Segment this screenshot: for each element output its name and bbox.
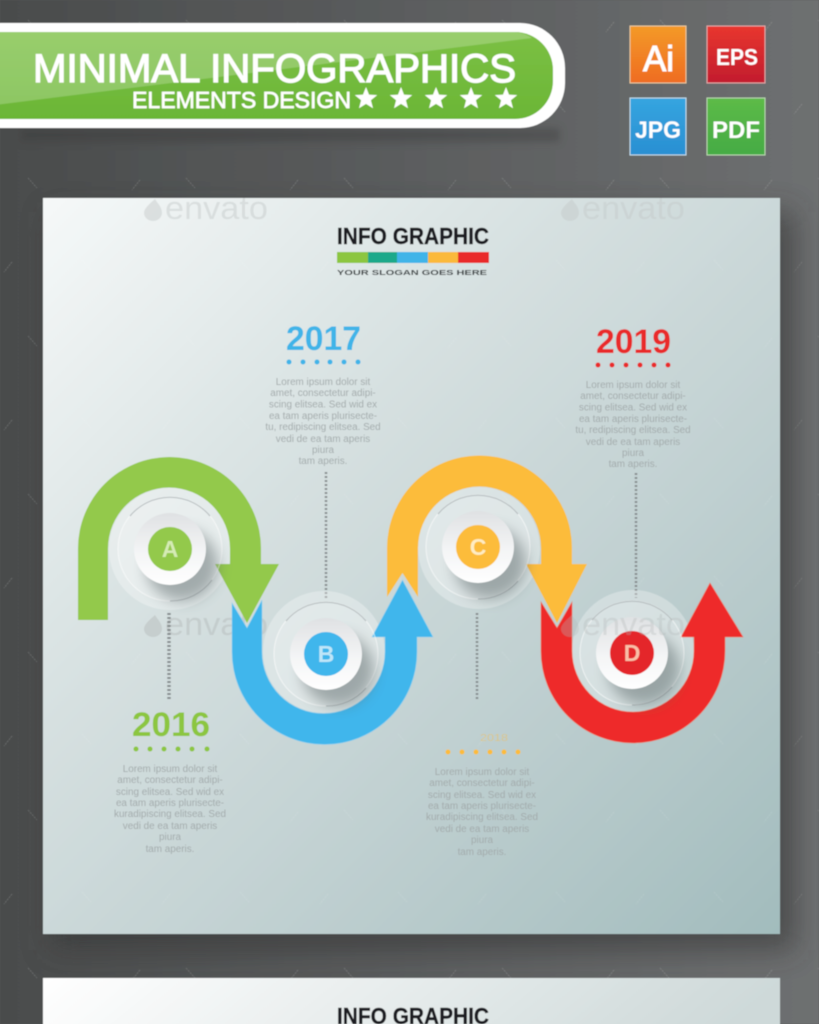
node C: [426, 495, 530, 599]
node D: [580, 601, 684, 705]
description: tu, redipiscing elitsea. Sed: [575, 425, 691, 436]
badge: JPG: JPG: [635, 117, 681, 144]
watermarks: envato: [582, 190, 685, 226]
description: piura: [622, 448, 644, 459]
description: [265, 377, 381, 467]
badge: EPS: [707, 26, 765, 83]
description: vedi de ea tam aperis: [123, 821, 217, 832]
description: tam aperis.: [299, 456, 347, 467]
description: piura: [471, 835, 493, 846]
description: scing elitsea. Sed wid ex: [428, 790, 536, 801]
description: [114, 764, 226, 855]
dots: [596, 362, 670, 368]
description: [575, 380, 691, 470]
node D: D: [624, 640, 640, 666]
description: piura: [159, 832, 181, 843]
subtitle text: ELEMENTS DESIGN: [132, 87, 351, 113]
description: scing elitsea. Sed wid ex: [269, 400, 377, 410]
description: tam aperis.: [609, 459, 657, 470]
milestone: 2019: [575, 323, 691, 470]
arrow B: blue: [232, 580, 433, 744]
title banner: [0, 23, 565, 128]
title text: MINIMAL INFOGRAPHICS: [33, 47, 516, 91]
description: tam aperis.: [458, 847, 506, 858]
milestone: 2018: 2018: [480, 733, 509, 744]
watermark over node D: envato: [582, 606, 685, 642]
watermarks: envato: [165, 606, 268, 642]
milestone: 2019: 2019: [596, 323, 671, 361]
description: tam aperis.: [146, 844, 194, 855]
color bar: [337, 252, 489, 263]
milestone: 2017: [265, 320, 381, 467]
node A: A: [162, 536, 178, 562]
description: Lorem ipsum dolor sit: [586, 380, 680, 391]
description: kuradipiscing elitsea. Sed: [114, 809, 226, 820]
header: info graphic: [337, 223, 489, 277]
badge: Ai: [630, 26, 686, 83]
description: piura: [312, 445, 334, 456]
milestone: 2016: 2016: [132, 706, 210, 744]
description: vedi de ea tam aperis: [276, 434, 370, 445]
header: info graphic: INFO GRAPHIC: [337, 223, 489, 249]
description: vedi de ea tam aperis: [435, 824, 529, 835]
slogan: YOUR SLOGAN GOES HERE: [337, 268, 487, 277]
description: scing elitsea. Sed wid ex: [116, 787, 224, 798]
badge: EPS: EPS: [716, 44, 758, 70]
description: amet, consectetur adipi-: [270, 388, 376, 399]
dotted connectors: [169, 472, 636, 700]
description: Lorem ipsum dolor sit: [123, 764, 217, 775]
description: amet, consectetur adipi-: [580, 391, 686, 402]
stars: [355, 87, 517, 108]
description: tu, redipiscing elitsea. Sed: [265, 422, 381, 433]
panel: second infographic preview: [43, 978, 780, 1024]
description: ea tam aperis plurisecte-: [269, 411, 377, 422]
description: amet, consectetur adipi-: [429, 778, 535, 789]
watermarks: [144, 190, 685, 642]
arch shading behind arrows: [109, 487, 694, 713]
badge: JPG: [630, 98, 686, 155]
dots: [286, 360, 360, 364]
panel shadows: [20, 128, 795, 950]
description: Lorem ipsum dolor sit: [276, 377, 370, 388]
badge: PDF: [707, 98, 765, 155]
description: amet, consectetur adipi-: [117, 775, 223, 786]
node A: [118, 497, 222, 601]
description: scing elitsea. Sed wid ex: [579, 402, 687, 414]
node B: B: [318, 641, 334, 667]
arrow A: green: [78, 457, 279, 623]
dots: [134, 746, 210, 752]
description: vedi de ea tam aperis: [586, 437, 680, 448]
dots: [446, 750, 520, 754]
badge: Ai: Ai: [643, 38, 674, 79]
description: Lorem ipsum dolor sit: [435, 767, 529, 778]
milestone: 2016: [114, 706, 226, 855]
description: ea tam aperis plurisecte-: [428, 801, 536, 812]
description: kuradipiscing elitsea. Sed: [426, 812, 538, 823]
watermarks: envato: [165, 190, 268, 226]
milestone: 2017: 2017: [286, 320, 361, 358]
arrow D: red: [541, 583, 743, 743]
arrow C: yellow: [387, 456, 587, 623]
node C: C: [470, 534, 486, 560]
description: [426, 767, 538, 858]
panel: main infographic: [43, 198, 780, 934]
description: ea tam aperis plurisecte-: [579, 414, 687, 425]
milestone: 2018: [426, 733, 538, 858]
node B: [274, 602, 378, 706]
description: ea tam aperis plurisecte-: [116, 798, 224, 809]
badge: PDF: PDF: [712, 117, 760, 144]
